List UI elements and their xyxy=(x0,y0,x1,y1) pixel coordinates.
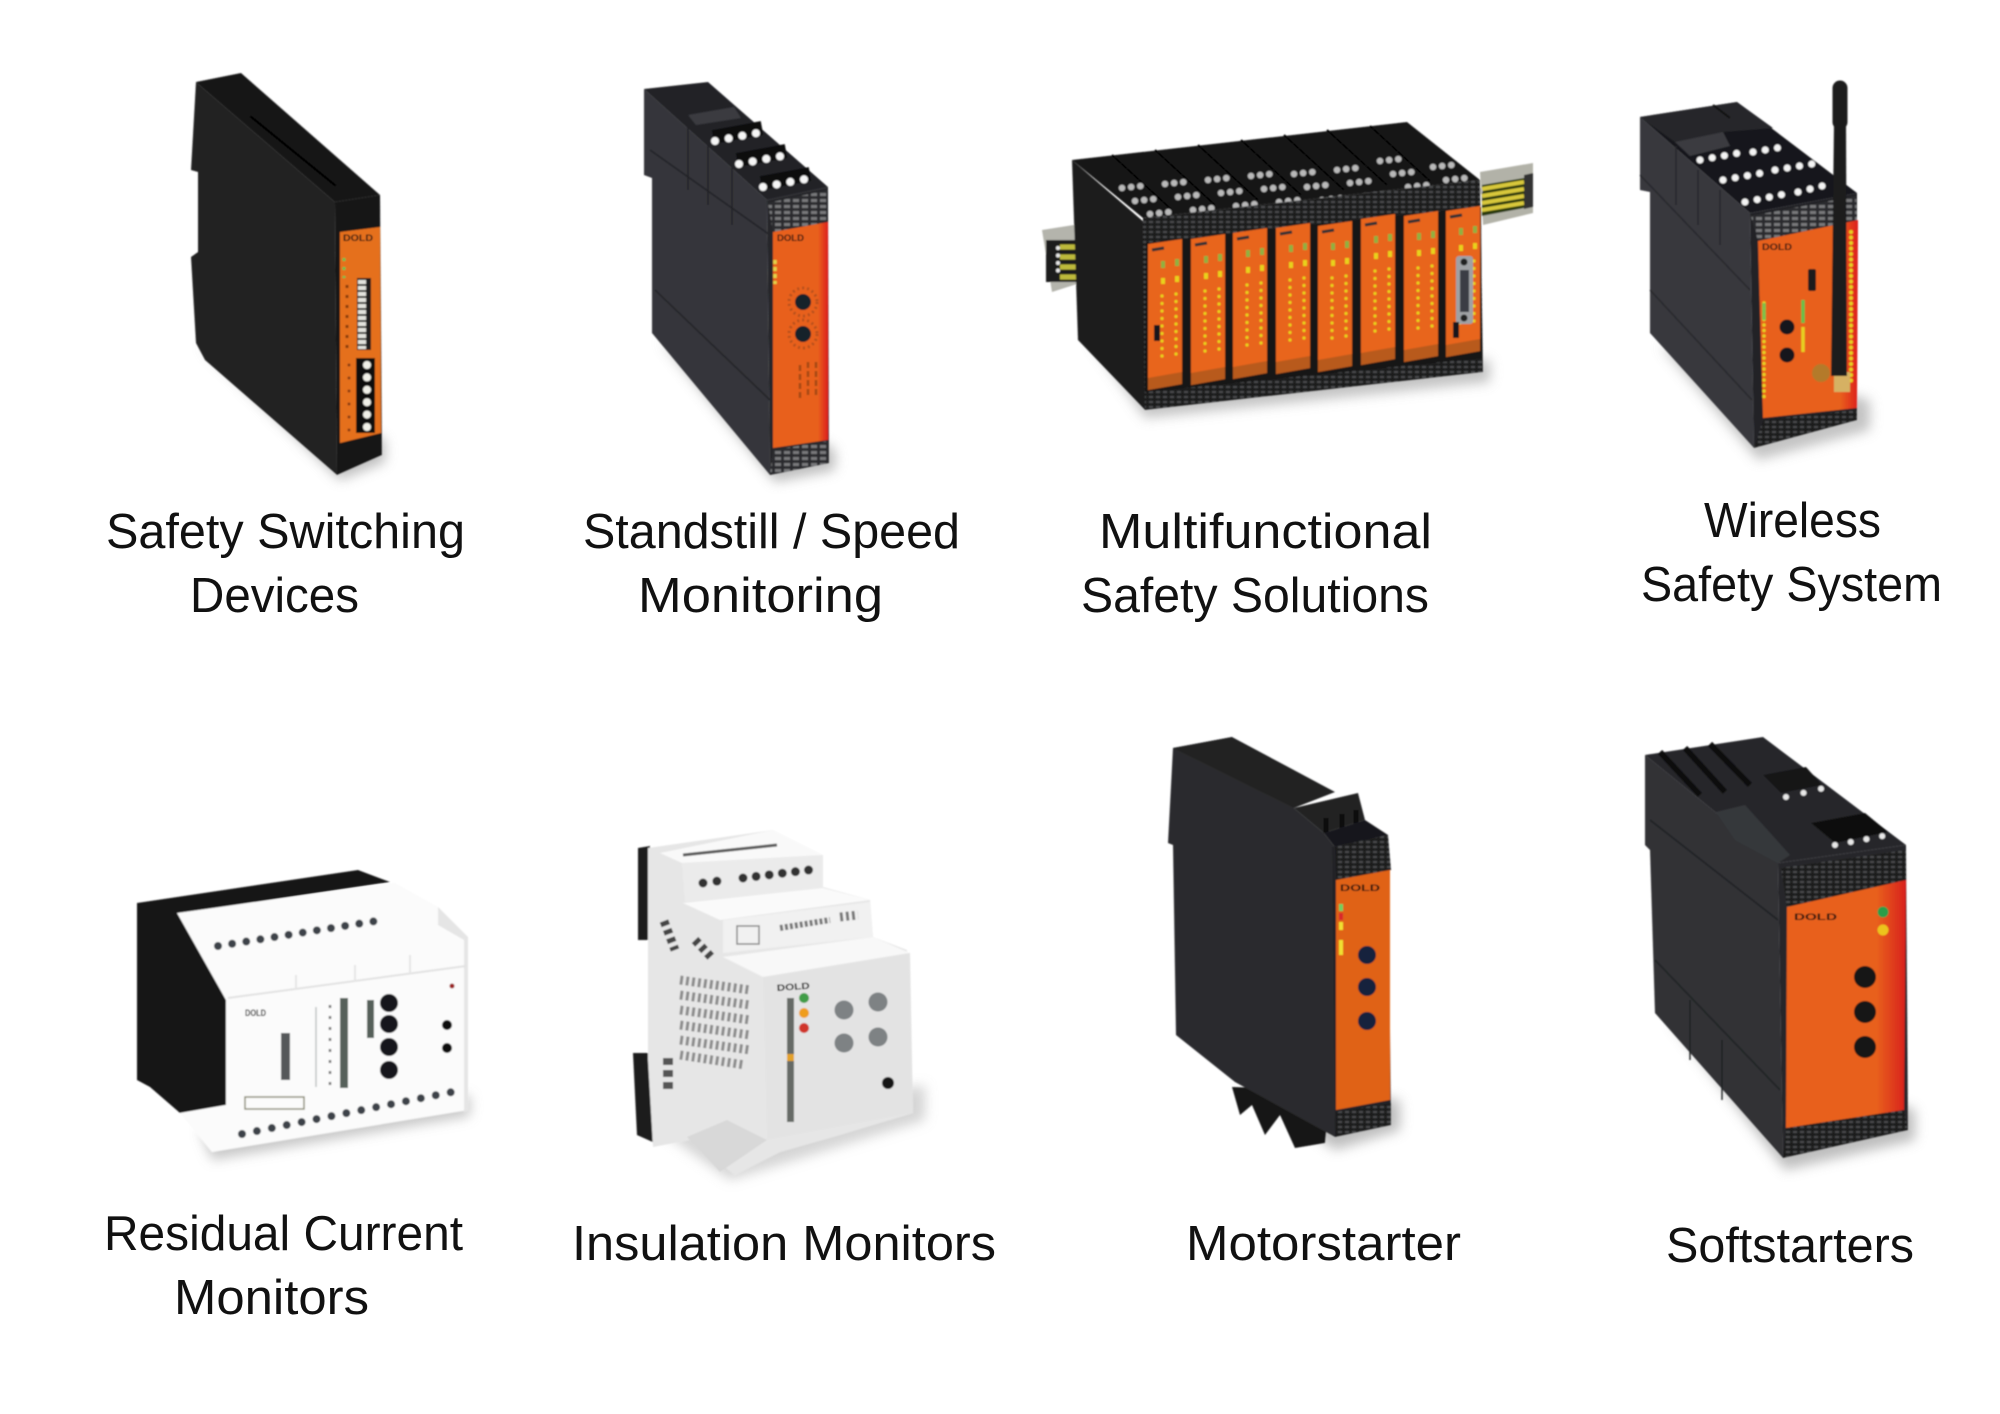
label: Safety Switching Devices xyxy=(106,505,465,623)
label: Softstarters: Softstarters xyxy=(1666,1219,1914,1273)
label: Multifunctional Safety Solutions xyxy=(1081,505,1432,623)
icon: residual current monitor: DOLD xyxy=(245,1008,266,1018)
icon: motorstarter: DOLD xyxy=(1340,883,1381,893)
DIN rail right xyxy=(1480,163,1533,225)
DIN clip xyxy=(633,846,655,1143)
icon: wireless safety device with antenna xyxy=(1640,88,1870,460)
panel: Softstarters xyxy=(1645,737,1915,1273)
icon: residual current monitor xyxy=(137,870,470,1160)
panel: Standstill / Speed Monitoring xyxy=(583,82,960,623)
icon: multifunctional safety module rack xyxy=(1042,122,1533,418)
label: Multifunctional Safety Solutions: Multifunctional xyxy=(1099,505,1432,559)
label: Wireless Safety System: Safety System xyxy=(1641,558,1942,612)
label: Multifunctional Safety Solutions: Safety Solutions xyxy=(1081,569,1429,623)
icon: standstill speed monitor: DOLD xyxy=(777,233,805,243)
icon: softstarter xyxy=(1645,737,1915,1170)
panel: Motorstarter xyxy=(1168,737,1461,1271)
icon: insulation monitor: DOLD xyxy=(776,981,811,993)
icon: insulation monitor xyxy=(633,830,925,1180)
icon: safety switching relay xyxy=(191,73,385,480)
panel: Wireless Safety System xyxy=(1640,88,1942,612)
label: Motorstarter: Motorstarter xyxy=(1186,1217,1461,1271)
label: Wireless Safety System xyxy=(1641,494,1942,612)
label: Safety Switching Devices: Devices xyxy=(190,569,359,623)
icon: wireless safety device with antenna: DOLD xyxy=(1762,242,1793,252)
panel: Residual Current Monitors xyxy=(104,870,470,1325)
panel: Multifunctional Safety Solutions xyxy=(1042,122,1533,623)
icon: motorstarter xyxy=(1168,737,1400,1150)
icon: standstill speed monitor xyxy=(644,82,835,482)
label: Standstill / Speed Monitoring xyxy=(583,505,960,623)
label: Wireless Safety System: Wireless xyxy=(1704,494,1881,548)
antenna xyxy=(1831,88,1847,376)
panel: Insulation Monitors xyxy=(572,830,996,1271)
DIN rail left xyxy=(1042,224,1080,292)
panel: Safety Switching Devices xyxy=(106,73,465,623)
label: Safety Switching Devices: Safety Switching xyxy=(106,505,465,559)
icon: safety switching relay: DOLD xyxy=(343,233,374,243)
icon: softstarter: DOLD xyxy=(1794,912,1838,922)
label: Residual Current Monitors: Residual Current xyxy=(104,1207,463,1261)
label: Residual Current Monitors xyxy=(104,1207,463,1325)
label: Standstill / Speed Monitoring: Standstill / Speed xyxy=(583,505,960,559)
label: Residual Current Monitors: Monitors xyxy=(174,1271,369,1325)
label: Standstill / Speed Monitoring: Monitoring xyxy=(638,569,883,623)
label: Insulation Monitors: Insulation Monitors xyxy=(572,1217,996,1271)
